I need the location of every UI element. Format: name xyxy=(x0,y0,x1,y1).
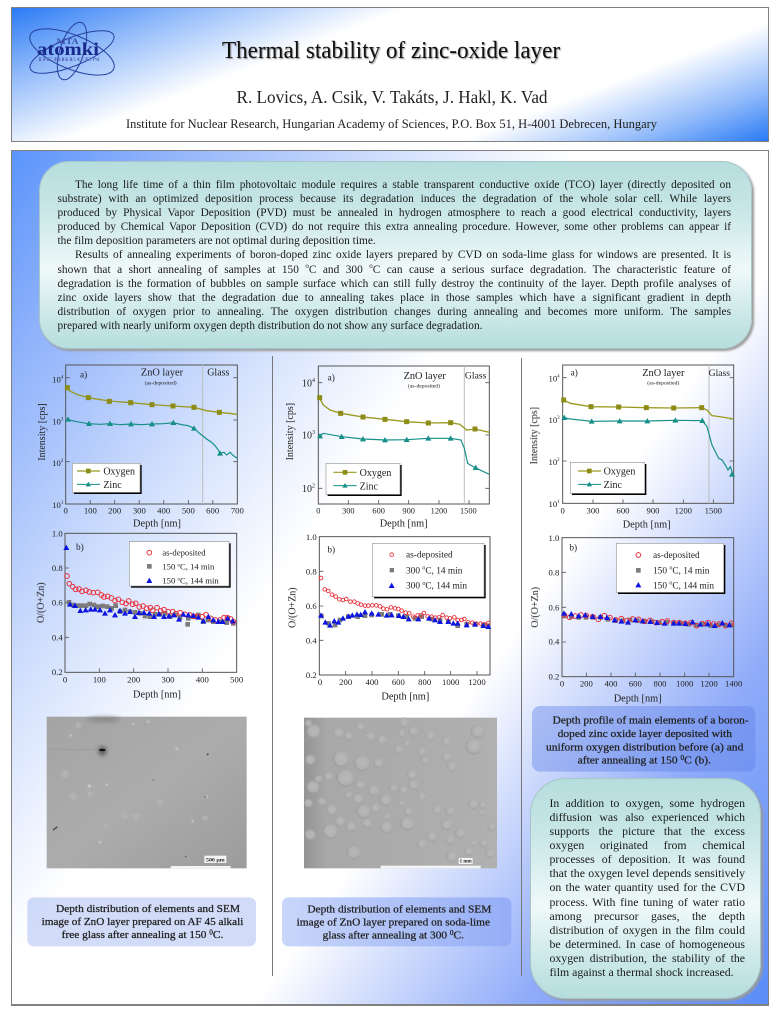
legend 3a xyxy=(570,462,646,495)
conclusion text: oxygen distribution, the stability of the xyxy=(550,951,745,965)
abstract paragraph 1: the film deposition parameters are not optimal during deposition time. xyxy=(58,235,376,247)
chart 3a: intensity vs depth: Intensity [cps] xyxy=(529,407,540,464)
conclusion text: film against a thermal shock increased. xyxy=(550,965,734,979)
legend 3b: as-deposited xyxy=(653,551,700,561)
chart 3a: intensity vs depth: 300 xyxy=(587,506,599,516)
conclusion text xyxy=(550,796,745,979)
chart 3b: oxygen ratio: 1000 xyxy=(676,679,693,689)
SEM image 2 xyxy=(304,718,497,868)
chart 3b: oxygen ratio: b) xyxy=(569,543,577,554)
caption 3: doped zinc oxide layer deposited with xyxy=(558,728,733,740)
affiliation: Institute for Nuclear Research, Hungarian Academy of Sciences, P.O. Box 51, H-4001 Debrecen, Hungary xyxy=(126,116,657,131)
chart 1a: intensity vs depth: 1 xyxy=(61,501,64,506)
abstract text box xyxy=(38,161,752,349)
legend 1a: Oxygen xyxy=(103,467,135,478)
chart 1b: oxygen ratio: 200 xyxy=(127,674,140,684)
legend 1b: 150 xyxy=(162,576,175,586)
chart 1a: intensity vs depth: 500 xyxy=(182,506,195,516)
chart 3b: oxygen ratio: 0.6 xyxy=(549,602,560,612)
legend 2b xyxy=(372,543,486,598)
chart 3a: intensity vs depth: 10 xyxy=(549,415,557,425)
caption 3: C (b). xyxy=(684,755,711,767)
caption 3: uniform oxygen distribution before (a) and xyxy=(546,741,744,753)
conclusion text: oxygen originated from chemical xyxy=(550,838,745,852)
chart 2a: intensity vs depth: ZnO layer xyxy=(404,371,446,382)
chart 2a: intensity vs depth: Depth [nm] xyxy=(380,519,428,530)
legend 2a: Zinc xyxy=(360,481,379,492)
chart 1a: intensity vs depth: 10 xyxy=(52,416,61,426)
chart 3b: oxygen ratio: 1.0 xyxy=(549,533,559,543)
abstract paragraph 2: degradation is the formation of bubbles on sample surface which can still fully destroy the continuity of the layer. Depth profile analyses of xyxy=(58,278,731,290)
SEM image 1: 500 µm xyxy=(206,857,225,863)
chart 2b: oxygen ratio: 1000 xyxy=(442,677,459,687)
legend 2b: 300 xyxy=(406,582,420,592)
chart 1b: oxygen ratio xyxy=(36,528,243,700)
chart 2b: oxygen ratio: 800 xyxy=(418,677,431,687)
legend 3b: 150 xyxy=(653,566,667,576)
legend 2b: C, 144 min xyxy=(425,582,467,592)
chart 3a: intensity vs depth: 2 xyxy=(557,458,560,463)
caption 2: image of ZnO layer prepared on soda-lime xyxy=(297,917,490,929)
chart 2b: oxygen ratio: 1.0 xyxy=(306,532,317,542)
chart 2a: intensity vs depth: 10 xyxy=(302,484,312,495)
chart 2a: intensity vs depth: Intensity [cps] xyxy=(285,403,296,460)
divider right xyxy=(521,358,522,976)
abstract paragraph 1 xyxy=(58,178,732,247)
chart 2b: oxygen ratio: 0.6 xyxy=(306,601,317,611)
chart 3a: intensity vs depth: Depth [nm] xyxy=(623,520,671,531)
chart 1a: intensity vs depth: ZnO layer xyxy=(141,368,184,379)
chart 3b: oxygen ratio: Depth [nm] xyxy=(614,693,662,704)
chart 1b: oxygen ratio: 0.2 xyxy=(52,667,63,677)
logo: MTA xyxy=(56,37,79,46)
chart 1a: intensity vs depth: 4 xyxy=(61,375,64,380)
chart 1a: intensity vs depth: 100 xyxy=(84,506,97,516)
chart 3b: oxygen ratio: 0.2 xyxy=(549,671,559,681)
caption 3 xyxy=(532,706,756,772)
chart 1b: oxygen ratio: b) xyxy=(76,542,84,553)
abstract paragraph 2: Results of annealing experiments of boron-doped zinc oxide layers prepared by CVD on soda-lime glass for windows are presented. It is xyxy=(75,249,731,261)
SEM image 1 xyxy=(47,717,247,868)
chart 2a: intensity vs depth: 10 xyxy=(302,379,312,390)
legend 2a: Oxygen xyxy=(360,468,391,479)
chart 1b: oxygen ratio: 500 xyxy=(230,674,243,684)
abstract paragraph 2: shown that a short annealing of samples at 150 oC and 300 oC can cause a serious surface degradation. The characteristic feature of xyxy=(58,262,731,276)
conclusion text: supports the picture that the excess xyxy=(550,824,745,838)
legend 1b: as-deposited xyxy=(162,548,206,558)
legend 3b: C, 144 min xyxy=(672,581,714,591)
chart 3a: intensity vs depth: 1500 xyxy=(705,506,722,516)
chart 2a: intensity vs depth: 0 xyxy=(316,507,320,516)
legend 3b: o xyxy=(669,566,672,572)
chart 3b: oxygen ratio: 400 xyxy=(605,679,617,689)
chart 1b: oxygen ratio: 100 xyxy=(93,674,106,684)
chart 1b: oxygen ratio: Depth [nm] xyxy=(133,689,181,700)
caption 2: 0 xyxy=(450,929,454,937)
chart 1a: intensity vs depth xyxy=(37,365,244,530)
chart 3b: oxygen ratio: 1400 xyxy=(725,679,742,689)
conclusion text: on the water quantity used for the CVD xyxy=(550,880,745,894)
chart 1a: intensity vs depth: a) xyxy=(80,370,87,381)
chart 3a: intensity vs depth: 4 xyxy=(557,374,560,379)
chart 1a: intensity vs depth: Intensity [cps] xyxy=(37,403,48,461)
title: Thermal stability of zinc-oxide layer xyxy=(222,38,560,64)
chart 2a: intensity vs depth: 3 xyxy=(312,430,315,436)
chart 2b: oxygen ratio: O/(O+Zn) xyxy=(287,587,298,628)
chart 2a: intensity vs depth: Glass xyxy=(465,371,487,382)
conclusion text: be determined. In case of homogeneous xyxy=(550,937,745,951)
chart 3b: oxygen ratio: 200 xyxy=(580,679,593,689)
caption 2: C. xyxy=(454,930,464,942)
legend 1a xyxy=(72,463,142,494)
caption 2: Depth distribution of elements and SEM xyxy=(307,904,492,916)
legend 3a: Zinc xyxy=(604,480,623,491)
chart 3b: oxygen ratio: 800 xyxy=(654,679,666,689)
chart 3a: intensity vs depth: 600 xyxy=(617,506,629,516)
chart 2a: intensity vs depth: (as-deposited) xyxy=(408,383,440,390)
chart 1a: intensity vs depth: 2 xyxy=(61,459,64,464)
logo: atomki xyxy=(37,39,99,59)
chart 1a: intensity vs depth: 3 xyxy=(61,417,64,422)
chart 3a: intensity vs depth: 10 xyxy=(549,457,557,467)
chart 1a: intensity vs depth: 700 xyxy=(231,506,244,516)
chart 2a: intensity vs depth xyxy=(285,366,489,530)
abstract paragraph 1: produced by Physical Vapor Deposition (PVD) must be annealed in hydrogen atmosphere to reach a good electrical conductivity, layers xyxy=(58,207,731,219)
abstract paragraph 2: distribution of oxygen prior to annealing. The oxygen distribution changes during annealing and becomes more uniform. The samples xyxy=(58,306,731,318)
logo: DEBRECEN xyxy=(38,57,100,63)
caption 3: 0 xyxy=(681,754,685,762)
column 3 charts xyxy=(529,364,742,704)
chart 1a: intensity vs depth: 10 xyxy=(52,374,61,384)
abstract paragraph 2: prepared with nearly uniform oxygen depth distribution do not show any surface degradation. xyxy=(58,320,482,332)
chart 3a: intensity vs depth: a) xyxy=(571,368,578,379)
SEM image 2: 1 mm xyxy=(460,860,473,865)
logo xyxy=(29,22,115,80)
legend 2b: o xyxy=(422,566,425,572)
chart 3b: oxygen ratio xyxy=(530,533,742,704)
divider left xyxy=(272,356,273,976)
chart 3a: intensity vs depth: ZnO layer xyxy=(642,368,685,379)
legend 3b xyxy=(616,543,725,594)
chart 2a: intensity vs depth: 10 xyxy=(302,431,312,442)
chart 3a: intensity vs depth xyxy=(529,365,734,531)
chart 1b: oxygen ratio: 0.6 xyxy=(52,598,63,608)
chart 3b: oxygen ratio: 0.4 xyxy=(549,637,560,647)
chart 2b: oxygen ratio xyxy=(287,532,490,702)
legend 3b: o xyxy=(669,581,672,587)
chart 2a: intensity vs depth: 2 xyxy=(312,483,315,489)
chart 1a: intensity vs depth: 600 xyxy=(206,506,219,516)
chart 1b: oxygen ratio: 0 xyxy=(63,674,67,684)
legend 1b: o xyxy=(177,563,180,568)
chart 1a: intensity vs depth: 10 xyxy=(52,500,61,510)
chart 2a: intensity vs depth: 1200 xyxy=(431,507,447,516)
caption 1: C. xyxy=(213,929,224,941)
legend 3a: Oxygen xyxy=(604,467,635,478)
chart 2a: intensity vs depth: a) xyxy=(328,372,335,383)
chart 1a: intensity vs depth: Glass xyxy=(207,368,230,379)
chart 2a: intensity vs depth: 4 xyxy=(312,378,315,384)
conclusion text: diffusion was also experienced which xyxy=(550,810,745,824)
chart 2b: oxygen ratio: 600 xyxy=(392,677,405,687)
chart 3b: oxygen ratio: O/(O+Zn) xyxy=(530,587,541,628)
chart 1b: oxygen ratio: 1.0 xyxy=(52,528,63,538)
chart 2b: oxygen ratio: 0 xyxy=(318,677,322,687)
caption 3: after annealing at 150 xyxy=(578,755,673,767)
legend 2b: C, 14 min xyxy=(425,566,463,576)
chart 2b: oxygen ratio: 0.2 xyxy=(306,670,317,680)
abstract paragraph 1: The long life time of a thin film photovoltaic module requires a stable transparent conductive oxide (TCO) layer (directly deposited on xyxy=(75,178,731,190)
chart 2b: oxygen ratio: 1200 xyxy=(468,677,486,687)
legend 1b xyxy=(129,542,231,588)
conclusion text: distribution of oxygen in the film could xyxy=(550,923,745,937)
legend 3b: 150 xyxy=(653,581,667,591)
lower left images and captions xyxy=(27,714,512,946)
chart 2a: intensity vs depth: 1500 xyxy=(460,507,477,516)
chart 3a: intensity vs depth: 3 xyxy=(557,416,560,421)
legend 2b: o xyxy=(422,581,425,587)
chart 3b: oxygen ratio: 0.8 xyxy=(549,567,559,577)
chart 1b: oxygen ratio: 0.4 xyxy=(52,632,63,642)
chart 3a: intensity vs depth: 10 xyxy=(549,499,557,509)
chart 1a: intensity vs depth: 300 xyxy=(133,506,146,516)
caption 1: image of ZnO layer prepared on AF 45 alkali xyxy=(42,916,243,928)
chart 2b: oxygen ratio: 400 xyxy=(366,677,378,687)
chart 2b: oxygen ratio: 200 xyxy=(339,677,352,687)
abstract paragraph 2 xyxy=(58,249,732,332)
chart 2b: oxygen ratio: b) xyxy=(327,545,335,556)
chart 3a: intensity vs depth: 1 xyxy=(557,500,560,505)
chart 2b: oxygen ratio: 0.4 xyxy=(306,635,317,645)
chart 2a: intensity vs depth: 300 xyxy=(342,507,355,516)
chart 1b: oxygen ratio: O/(O+Zn) xyxy=(36,582,47,623)
abstract paragraph 1: substrate) with an optimized deposition process because its degradation induces the degradation of the whole solar cell. While layers xyxy=(58,193,731,205)
legend 1b: o xyxy=(177,577,180,582)
conclusion text: process. With fine tuning of water ratio xyxy=(550,895,745,909)
chart 3b: oxygen ratio: 600 xyxy=(629,679,642,689)
legend 1b: C, 14 min xyxy=(180,562,215,572)
chart 3a: intensity vs depth: 1200 xyxy=(675,506,692,516)
chart 1a: intensity vs depth: 0 xyxy=(64,506,68,516)
column 1 charts xyxy=(36,364,244,700)
legend 2b: 300 xyxy=(406,566,420,576)
chart 2b: oxygen ratio: 0.8 xyxy=(306,566,317,576)
conclusion text: that the oxygen level depends sensitively xyxy=(550,866,745,880)
chart 3a: intensity vs depth: 900 xyxy=(647,506,659,516)
chart 3b: oxygen ratio: 0 xyxy=(560,679,564,689)
abstract paragraph 2: zinc oxide layers show that the degradation due to annealing takes place in those samples which have a significant gradient in depth xyxy=(58,292,731,304)
chart 1b: oxygen ratio: 0.8 xyxy=(52,563,63,573)
chart 2a: intensity vs depth: 600 xyxy=(372,507,385,516)
chart 1a: intensity vs depth: (as-deposited) xyxy=(145,380,177,387)
caption 1: free glass after annealing at 150 xyxy=(62,929,202,941)
chart 3a: intensity vs depth: 0 xyxy=(561,506,565,516)
chart 3a: intensity vs depth: Glass xyxy=(709,368,730,379)
caption 2: glass after annealing at 300 xyxy=(323,930,443,942)
chart 1a: intensity vs depth: 400 xyxy=(157,506,170,516)
legend 1a: Zinc xyxy=(103,480,122,491)
chart 2a: intensity vs depth: 900 xyxy=(402,507,415,516)
caption 1: Depth distribution of elements and SEM xyxy=(56,903,240,915)
authors: R. Lovics, A. Csik, V. Takáts, J. Hakl, K. Vad xyxy=(236,87,548,107)
conclusion text box xyxy=(530,778,761,999)
legend 3b: C, 14 min xyxy=(672,566,710,576)
caption 3: Depth profile of main elements of a boron- xyxy=(553,715,749,727)
chart 3a: intensity vs depth: 10 xyxy=(549,373,557,383)
chart 1b: oxygen ratio: 400 xyxy=(196,674,209,684)
conclusion text: processes of deposition. It was found xyxy=(550,852,745,866)
chart 1a: intensity vs depth: Depth [nm] xyxy=(133,519,181,530)
column 2 charts xyxy=(285,366,492,702)
header panel xyxy=(11,7,769,142)
caption 1 xyxy=(27,897,256,946)
caption 2 xyxy=(282,897,511,946)
chart 3a: intensity vs depth: (as-deposited) xyxy=(647,379,679,386)
chart 1b: oxygen ratio: 300 xyxy=(162,674,174,684)
legend 2a xyxy=(326,463,402,496)
legend 2b: as-deposited xyxy=(406,551,453,561)
caption 1: 0 xyxy=(209,928,213,936)
conclusion text: In addition to oxygen, some hydrogen xyxy=(550,796,745,810)
chart 3b: oxygen ratio: 1200 xyxy=(700,679,718,689)
chart 1a: intensity vs depth: 200 xyxy=(108,506,121,516)
legend 1b: C, 144 min xyxy=(180,576,219,586)
chart 1a: intensity vs depth: 10 xyxy=(52,458,61,468)
abstract paragraph 1: produced by Chemical Vapor Deposition (CVD) do not require this extra annealing procedure. However, some other problems can appear if xyxy=(58,221,731,233)
conclusion text: among precursor gases, the depth xyxy=(550,909,745,923)
chart 2b: oxygen ratio: Depth [nm] xyxy=(381,691,429,702)
legend 1b: 150 xyxy=(162,562,175,572)
